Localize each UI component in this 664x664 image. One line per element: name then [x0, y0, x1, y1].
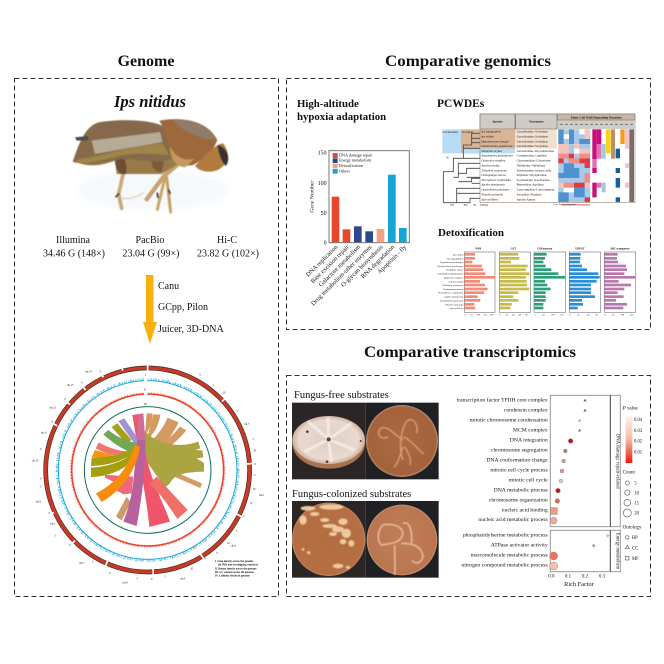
chromosome labels: 0 [51, 421, 53, 424]
chromosome labels: chr.7 [79, 562, 85, 565]
sequencing data: PacBio: 23.04 G (99×) [122, 248, 180, 260]
chromosome labels: 5 [54, 535, 56, 538]
axis ticks: 40 [587, 313, 590, 316]
species labels: Dendrolimus punctatus [440, 299, 463, 302]
chart: P450 [464, 248, 495, 312]
chart: UDPGT [569, 248, 601, 312]
species labels: Plutella xylostella [445, 303, 464, 306]
chromosome labels: 0 [40, 448, 42, 451]
heading: Comparative transcriptomics: Comparative transcriptomics [364, 344, 576, 361]
axis ticks: 0 [464, 313, 466, 316]
legend: ontology: Ontology [623, 526, 642, 531]
chromosome labels: chr.12 [49, 406, 57, 409]
bar chart legend [333, 152, 373, 174]
taxonomy column: Curculionidae: Dryophthorinae [517, 149, 555, 153]
bar chart: gene number: 100 [318, 181, 327, 187]
species column: Nicrophorus vespilloides [480, 178, 512, 182]
sequencing data: Hi-C: Hi-C [217, 235, 237, 246]
legend: ontology: MF [632, 557, 639, 562]
subheading: Detoxification: Detoxification [438, 227, 504, 239]
axis ticks: 100 [477, 313, 481, 316]
chromosome labels: chr.10 [32, 460, 39, 463]
axis ticks: 0 [604, 313, 606, 316]
strip: DNA damage repair-related: DNA damage repair-related [615, 433, 620, 489]
term labels: DNA metabolic process [494, 487, 548, 493]
chromosome labels: 10 [223, 391, 226, 394]
sequencing data: Hi-C: 23.82 G (102×) [197, 248, 259, 260]
heatmap scale: Gene Family Expansion [553, 203, 577, 206]
taxonomy column: Chrysomelidae: Galerucinae [517, 159, 551, 163]
term labels: DNA conformation change [486, 456, 548, 463]
heading: Genome: Genome [118, 53, 174, 70]
chart: GST [499, 248, 531, 312]
species column: Dendrolimus punctatus [480, 188, 510, 192]
taxonomy column: Curculionidae: Scolytinae [517, 144, 548, 148]
term labels: macromolecule metabolic process [471, 552, 548, 558]
axis ticks: 150 [630, 313, 634, 316]
chromosome labels: 0 [100, 371, 102, 374]
species column: Dendroctonus ponderosae [480, 144, 513, 148]
legend: count: 5 [634, 482, 637, 487]
axis ticks: 60 [519, 313, 522, 316]
phylogenetic tree: 100 [463, 204, 468, 207]
heading: Comparative genomics: Comparative genomics [385, 53, 551, 70]
bar chart: gene number [305, 151, 409, 307]
bar chart legend: Energy metabolism [339, 158, 372, 163]
taxonomy column: Curculionidae: Scolytinae [517, 134, 548, 138]
chromosome labels: chr.14 [85, 371, 92, 374]
chromosome labels: chr.13 [67, 384, 74, 387]
legend: ontology [623, 526, 642, 562]
legend: p value: P value [622, 406, 639, 411]
heatmap table: plant cell wall degrading enzymes: Species [492, 120, 504, 124]
legend: count: 10 [634, 491, 640, 496]
chromosome labels: chr.1 [259, 494, 265, 497]
chromosome labels: 5 [204, 557, 206, 560]
species column: Ips typographus [480, 130, 501, 134]
term labels: phosphatidylserine metabolic process [463, 533, 548, 539]
axis ticks: 40 [512, 313, 515, 316]
chart: UDPGT: UDPGT [575, 248, 585, 251]
axis ticks: 0 [499, 313, 501, 316]
species labels: Agrilus planipennis [444, 296, 463, 299]
chromosome labels: 0 [237, 410, 239, 413]
bar chart: gene number: 150 [318, 151, 327, 157]
chromosome labels: chr.11 [41, 431, 48, 434]
panel: comparative genomics [286, 78, 650, 330]
taxonomy column: Nitidulidae: Nitidulinae [517, 163, 546, 167]
bar chart: gene number: Gene Number [309, 181, 315, 213]
axis ticks: 50 [612, 313, 615, 316]
legend: count [623, 470, 640, 517]
chromosome labels: 5 [254, 474, 256, 477]
term labels: mitotic cell cycle [509, 477, 548, 483]
taxonomy column: Buprestidae: Agrilinae [517, 183, 544, 187]
bar chart: gene number: RNA degradation [360, 243, 397, 280]
taxonomy column: Lasiocampidae: Lasiocampinae [517, 188, 555, 192]
sequencing data: PacBio: PacBio [136, 235, 164, 246]
chart: P450: P450 [476, 248, 482, 251]
species labels: Dendroctonus ponderosae [437, 265, 464, 268]
photo: fungus-free, right dish [366, 403, 439, 479]
phylogenetic tree: 50 [473, 204, 477, 207]
term labels: MCM complex [513, 427, 548, 433]
phylogenetic tree: Curculionidae [443, 131, 459, 134]
taxonomy column: Silphidae: Nicrophorinae [517, 173, 547, 177]
species labels: Nicrophorus vespilloides [438, 292, 463, 295]
photo: fungus-colonized, left dish [292, 501, 366, 578]
subheading: hypoxia adaptation: hypoxia adaptation [297, 111, 386, 123]
photo: fungus-free, left dish [292, 403, 366, 479]
species labels: Hypothenemus hampei [440, 261, 464, 264]
panel: genome [14, 78, 278, 596]
x axis [548, 575, 606, 580]
axis ticks: 80 [525, 313, 529, 316]
species column: Agrilus planipennis [480, 183, 506, 187]
axis ticks: 20 [577, 313, 580, 316]
heatmap table: plant cell wall degrading enzymes [442, 114, 635, 207]
axis ticks: 20 [505, 313, 509, 316]
chromosome labels: 0 [243, 515, 245, 518]
chromosome labels: 5 [236, 530, 238, 533]
axis ticks: 100 [621, 313, 625, 316]
subheading: PCWDEs: PCWDEs [437, 98, 485, 110]
heat cells: left block [558, 129, 590, 202]
species labels [437, 253, 464, 310]
chromosome labels: chr.8 [122, 581, 128, 584]
chromosome labels: chr.9 [36, 501, 42, 504]
taxonomy column: Scarabaeidae: Scarabaeinae [517, 178, 550, 182]
taxonomy column: Cerambycidae: Lamiinae [517, 154, 547, 158]
taxonomy column: Noctuidae: Plusiinae [517, 192, 542, 196]
chromosome labels: chr.7 [244, 423, 250, 426]
heatmap scale [553, 203, 590, 206]
strip: energy metabolism: Energy metabolism [615, 533, 620, 569]
species labels: Onthophagus taurus [443, 288, 463, 291]
bar chart: gene number: 0 [324, 240, 327, 246]
taxonomy column [517, 130, 555, 201]
circos legend: I. Gene density across the genome [215, 560, 254, 563]
species column: Diabrotica virgifera [480, 159, 506, 163]
species column: Ips nitidus [480, 134, 495, 138]
species column: Tribolium castaneum [481, 168, 507, 172]
chart: ABC transporter: ABC transporter [610, 248, 631, 251]
chromosome labels: chr.5 [180, 577, 186, 580]
assembly tools: Canu [158, 281, 179, 292]
axis ticks: 60 [595, 313, 599, 316]
species labels: Tribolium castaneum [442, 284, 463, 287]
phylogenetic tree: 0 MYA [480, 204, 488, 207]
species labels: Sitophilus oryzae [446, 269, 464, 272]
bubble chart: enrichment [457, 395, 643, 588]
term labels: chromosome organization [489, 497, 548, 503]
sequencing data: Illumina: Illumina [56, 235, 90, 246]
heatmap table: plant cell wall degrading enzymes: Plant Cell Wall Degrading Enzymes [571, 115, 622, 119]
species column [480, 130, 514, 201]
term labels: ATPase activator activity [491, 542, 548, 548]
term labels: nucleic acid metabolic process [478, 517, 548, 523]
chromosome labels: 0 [64, 398, 66, 401]
chromosome labels: 0 [255, 463, 257, 466]
term labels: mitotic cell cycle process [490, 467, 548, 473]
taxonomy column: Curculionidae: Scolytinae [517, 130, 548, 134]
species column: Hypothenemus hampei [480, 139, 509, 143]
chromosome labels: 0 [109, 572, 111, 575]
chromosome labels: 5 [164, 575, 166, 578]
chromosome labels: 0 [49, 512, 51, 515]
bar chart: gene number: Base excision repair [310, 243, 351, 285]
phylogenetic tree: 150 [450, 204, 455, 207]
bar charts: detoxification gene families [437, 248, 636, 316]
track: GC content [84, 407, 211, 533]
circos legend: IV. Collinear blocks of genome [215, 575, 250, 578]
x axis: 0.2 [582, 575, 589, 580]
species column: Onthophagus taurus [481, 173, 507, 177]
chart: COEesterase [534, 248, 566, 312]
collinear blocks [91, 413, 204, 527]
x axis: 0.1 [565, 575, 572, 580]
chromosome labels: 10 [253, 450, 257, 453]
chart frames [550, 395, 620, 572]
label: fungus-free: Fungus-free substrates [294, 390, 389, 401]
term labels: DNA integration [510, 437, 548, 443]
chromosome labels: 10 [253, 488, 256, 491]
chromosome labels: I [145, 374, 146, 377]
term labels: nucleic acid binding [502, 507, 548, 513]
chromosome labels: 0 [217, 552, 219, 555]
legend: p value: 0.02 [634, 440, 643, 445]
legend: count: Count [623, 470, 635, 475]
chart: ABC transporter [604, 248, 636, 312]
chromosome labels: 5 [40, 485, 42, 488]
term labels: condensin complex [504, 408, 548, 414]
species column: Sitophilus oryzae [481, 149, 503, 153]
photographs: substrates [292, 403, 439, 578]
legend: p value: 0.04 [634, 418, 643, 423]
bubble chart: enrichment: Rich Factor [564, 581, 595, 588]
legend: ontology: BP [632, 536, 638, 541]
chromosome labels: 0 [151, 578, 153, 581]
species column: Aethina tumida [480, 163, 500, 167]
term labels [457, 397, 548, 568]
taxonomy column: Apidae: Apinae [517, 197, 536, 201]
bar chart: gene number: 50 [321, 211, 327, 217]
chromosome labels: 15 [250, 502, 253, 505]
assembly tools: GCpp, Pilon [158, 302, 208, 313]
phylogenetic tree: Scolytinae [462, 131, 474, 134]
chromosome labels: 0 [69, 544, 71, 547]
x axis: 0.3 [599, 575, 606, 580]
axis ticks: 50 [542, 313, 545, 316]
legend: count: 15 [634, 501, 640, 506]
track: gene density [56, 379, 239, 561]
axis ticks: 150 [483, 313, 488, 316]
axis ticks: 0 [569, 313, 571, 316]
circos legend: (in 1Mb non-overlapping windows) [218, 564, 258, 567]
term labels: nitrogen compound metabolic process [461, 562, 548, 568]
phylogenetic tree: 50 [446, 157, 449, 160]
species labels: Aethina tumida [448, 280, 464, 283]
chromosome labels: 0 [200, 373, 202, 376]
chromosome labels: III [144, 403, 147, 406]
chromosome labels: 10 [190, 567, 194, 570]
species column: Anoplophora glabripennis [480, 154, 514, 158]
data points [550, 399, 609, 570]
axis ticks: 50 [470, 313, 474, 316]
beetle photograph [73, 119, 230, 212]
species labels: Diabrotica virgifera [444, 276, 464, 279]
bar chart: gene number: DNA replication [305, 243, 340, 278]
circos legend: II. Repeat density across the genome [215, 567, 257, 570]
bar chart legend: Detoxification [339, 163, 364, 168]
heat cells: right block [592, 129, 634, 202]
chromosome labels: chr.2 [50, 523, 56, 526]
assembly tools: Juicer, 3D-DNA [158, 324, 224, 335]
legend: p value: 0.01 [634, 451, 643, 456]
heatmap table: plant cell wall degrading enzymes: Taxonomy [529, 120, 544, 124]
bar chart: gene number: Galactose metabolism [317, 244, 362, 288]
axis ticks: 150 [560, 313, 565, 316]
bar chart legend: Others [339, 168, 350, 173]
track: chromosome ring [37, 363, 255, 577]
bar chart: gene number: Apoptosis - fly [376, 243, 409, 276]
term labels: transcription factor TFIIH core complex [457, 397, 548, 404]
chromosome labels: 0 [40, 477, 42, 480]
species labels: Ips typographus [447, 257, 463, 260]
circos legend: III. GC content across the genome [215, 571, 255, 574]
axis ticks: 200 [490, 313, 494, 316]
chromosome labels: 5 [92, 561, 94, 564]
legend: p value [622, 406, 643, 463]
chromosome labels: II [144, 389, 146, 392]
term labels: chromosome segregation [491, 447, 548, 453]
arrow: assembly pipeline [143, 275, 157, 344]
chart: GST: GST [511, 248, 516, 251]
chromosome labels [32, 371, 265, 584]
sequencing data: Illumina: 34.46 G (148×) [43, 248, 105, 260]
species labels: Ips nitidus [453, 253, 463, 256]
subheading: hypoxia adaptation: High-altitude [297, 98, 359, 110]
axis ticks: 100 [551, 313, 555, 316]
bar chart legend: DNA damage repair [339, 152, 373, 157]
x axis: 0.0 [548, 575, 555, 580]
species labels: Anoplophora glabripennis [437, 273, 463, 276]
label: fungus-colonized: Fungus-colonized substrates [292, 489, 411, 500]
species column: Plutella xylostella [480, 192, 503, 196]
chromosome labels: 10 [227, 542, 230, 545]
photo: fungus-colonized, right dish [366, 501, 439, 578]
bar chart: gene number: O-glycan biosynthesis [340, 243, 385, 289]
bar chart: gene number: Drug metabolism-other enzymes [310, 243, 374, 307]
chromosome labels: chr.6 [231, 545, 237, 548]
circos plot [32, 363, 265, 584]
panel: comparative transcriptomics [286, 376, 650, 596]
taxonomy column: Curculionidae: Scolytinae [517, 139, 548, 143]
phylogenetic tree [442, 129, 557, 207]
legend: ontology: CC [632, 546, 638, 551]
axis ticks [464, 313, 634, 316]
chromosome labels: 0 [81, 381, 83, 384]
species labels: Apis mellifera [449, 307, 464, 310]
legend: p value: 0.03 [634, 429, 643, 434]
species column: Apis mellifera [480, 197, 499, 201]
species name: Ips nitidus [113, 92, 186, 111]
chromosome labels: 5 [137, 577, 139, 580]
axis ticks: 0 [534, 313, 536, 316]
taxonomy column: Tenebrionidae: incertae sedis [517, 168, 552, 172]
term labels: mitotic chromosome condensation [470, 418, 548, 424]
chart: COEesterase: COEesterase [537, 248, 553, 251]
legend: count: 20 [634, 512, 640, 517]
chromosome labels: 5 [213, 385, 215, 388]
track: repeat density [71, 394, 224, 546]
chromosome labels: 5 [253, 438, 255, 441]
gaps in inner tracks [144, 375, 147, 409]
